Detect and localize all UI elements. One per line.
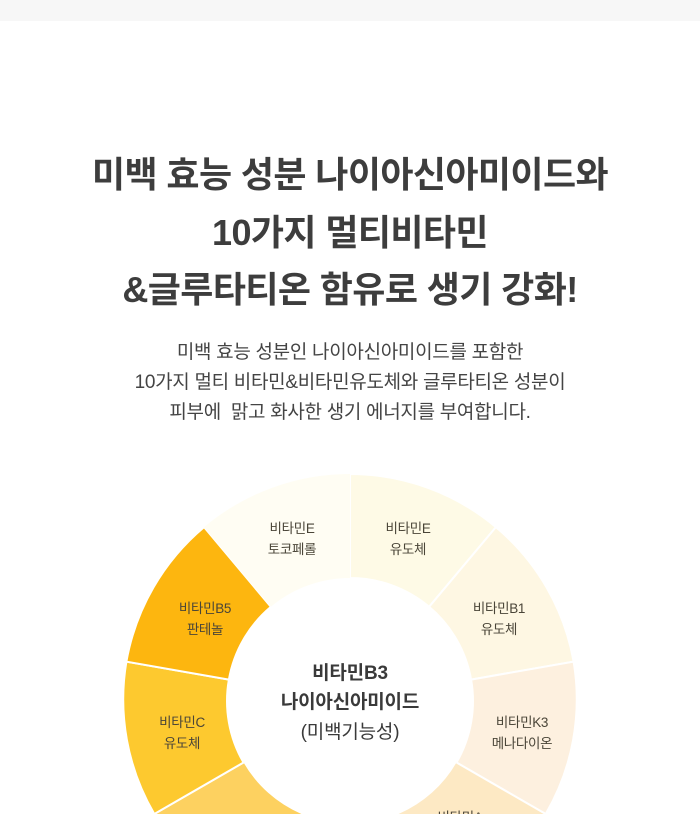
center label: vitamin B3 niacinamide: 나이아신아미이드 xyxy=(281,691,419,713)
segment: vitamin C derivative: 유도체 xyxy=(164,736,200,751)
segment: vitamin E derivative xyxy=(350,474,496,607)
segment: vitamin E derivative: 유도체 xyxy=(390,542,426,557)
description text: 미백 효능 성분인 나이아신아미이드를 포함한 10가지 멀티 비타민&비타민유도체와 글루타티온 성분이 피부에 맑고 화사한 생기 에너지를 부여합니다. xyxy=(135,342,565,423)
title xyxy=(92,154,608,310)
segment: vitamin A xyxy=(399,762,546,814)
segment: vitamin E derivative: 비타민E xyxy=(385,521,431,536)
segment: vitamin E tocopherol: 비타민E xyxy=(269,521,315,536)
segment: vitamin B5 panthenol: 판테놀 xyxy=(187,622,223,637)
segment: vitamin B1 derivative: 비타민B1 xyxy=(473,601,525,616)
segment: vitamin C derivative xyxy=(123,662,244,814)
segment: vitamin E tocopherol: 토코페롤 xyxy=(268,542,316,557)
segment: vitamin B5 panthenol xyxy=(126,527,271,680)
segment: vitamin K3 menadione xyxy=(456,662,577,814)
segment: vitamin K3 menadione: 비타민K3 xyxy=(496,715,548,730)
center label: vitamin B3 niacinamide xyxy=(281,662,419,743)
center label: vitamin B3 niacinamide: 비타민B3 xyxy=(312,662,388,684)
title: 미백 효능 성분 나이아신아미이드와 xyxy=(92,154,608,195)
segment: vitamin K3 menadione: 메나다이온 xyxy=(492,736,552,751)
segment: vitamin B1 derivative: 유도체 xyxy=(481,622,517,637)
segment: vitamin C derivative: 비타민C xyxy=(159,715,205,730)
segment: vitamin E tocopherol xyxy=(204,474,350,607)
segment: vitamin B1 derivative xyxy=(429,527,574,680)
title: 10가지 멀티비타민 xyxy=(212,212,488,252)
title: &글루타티온 함유로 생기 강화! xyxy=(122,269,578,310)
center label: vitamin B3 niacinamide: (미백기능성) xyxy=(301,721,399,743)
top grey band xyxy=(0,0,700,21)
segment: bottom-left vitamin xyxy=(154,762,301,814)
segment: vitamin B5 panthenol: 비타민B5 xyxy=(179,601,231,616)
